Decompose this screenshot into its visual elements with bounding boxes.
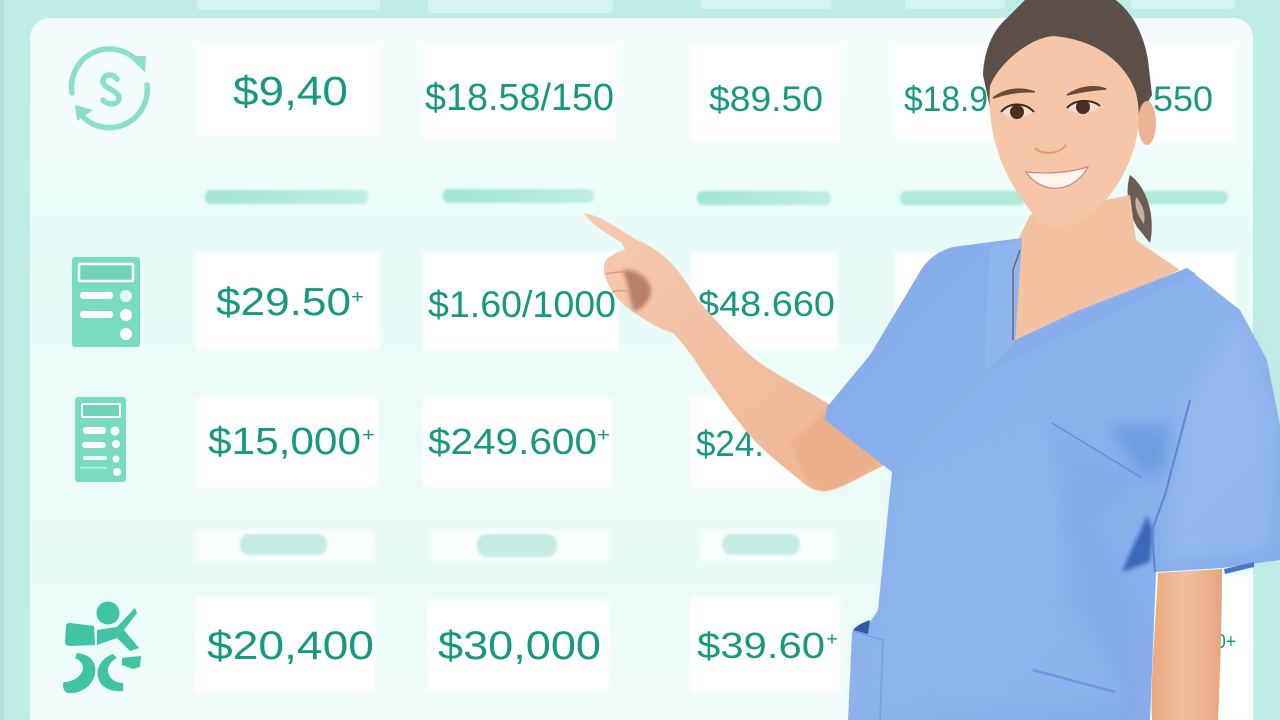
row 3 values: + xyxy=(597,425,610,446)
chest pocket shading xyxy=(1105,425,1170,478)
row 2 values: + xyxy=(351,287,364,308)
placeholder pills row xyxy=(240,534,800,557)
elbow shade xyxy=(790,405,878,490)
pocket flap line xyxy=(1052,423,1142,478)
nose xyxy=(1035,145,1066,153)
row 4 values: 0+ xyxy=(1216,631,1236,653)
row 3 values xyxy=(208,421,764,464)
eyes xyxy=(1001,105,1034,117)
icon: calculator large xyxy=(72,257,140,347)
icon: calculator small xyxy=(75,397,126,482)
left arm and pointing hand xyxy=(584,213,885,491)
neck and chest xyxy=(1013,195,1180,342)
row 3 values: $249.600 xyxy=(428,421,597,462)
row 2 values xyxy=(216,281,835,325)
sleeve seam xyxy=(1152,400,1190,572)
row 1 values: $89.50 xyxy=(709,80,823,119)
lower pockets xyxy=(853,620,883,638)
chest highlight xyxy=(880,420,1120,700)
icon: figure with baggage xyxy=(63,602,141,693)
right arm xyxy=(1152,569,1222,720)
head and face xyxy=(989,36,1156,227)
row 4 values: + xyxy=(826,629,838,649)
row 2 values: $1.60/1000 xyxy=(428,284,616,325)
row 3 values: $15,000 xyxy=(208,421,361,463)
row 4 values: $20,400 xyxy=(207,624,374,668)
row 1 values: $18.9 xyxy=(904,80,988,119)
collar inner shadow xyxy=(1013,250,1020,340)
side fold dark xyxy=(1122,515,1153,572)
table cell backgrounds xyxy=(195,44,1252,720)
scrubs top xyxy=(825,238,1280,720)
right sleeve lower shadow xyxy=(1224,562,1254,574)
row 1 values: $18.58/150 xyxy=(425,77,614,119)
row 4 values xyxy=(207,624,1236,668)
row 1 values: 550 xyxy=(1153,80,1213,119)
row 4 values: $39.60 xyxy=(697,625,825,666)
smile xyxy=(1026,167,1088,188)
ponytail xyxy=(1128,175,1152,243)
nurse figure xyxy=(584,0,1280,720)
placeholder bars row xyxy=(205,189,1228,205)
row 1 values xyxy=(233,68,1213,119)
row 4 values: $30,000 xyxy=(438,624,601,668)
fist shadow xyxy=(622,270,651,311)
icon: dollar cycle xyxy=(72,49,147,128)
salary figures xyxy=(207,68,1236,668)
hair back xyxy=(983,0,1152,115)
row 1 values: $9,40 xyxy=(233,68,348,114)
row 2 values: $48.660 xyxy=(698,285,835,324)
sleeve highlight xyxy=(1165,320,1275,560)
row 3 values: + xyxy=(362,425,375,446)
finger creases xyxy=(606,272,630,292)
eyebrows xyxy=(993,89,1035,98)
row 3 values: $24. xyxy=(696,423,764,464)
collar xyxy=(985,238,1022,372)
row 2 values: $29.50 xyxy=(216,281,351,324)
